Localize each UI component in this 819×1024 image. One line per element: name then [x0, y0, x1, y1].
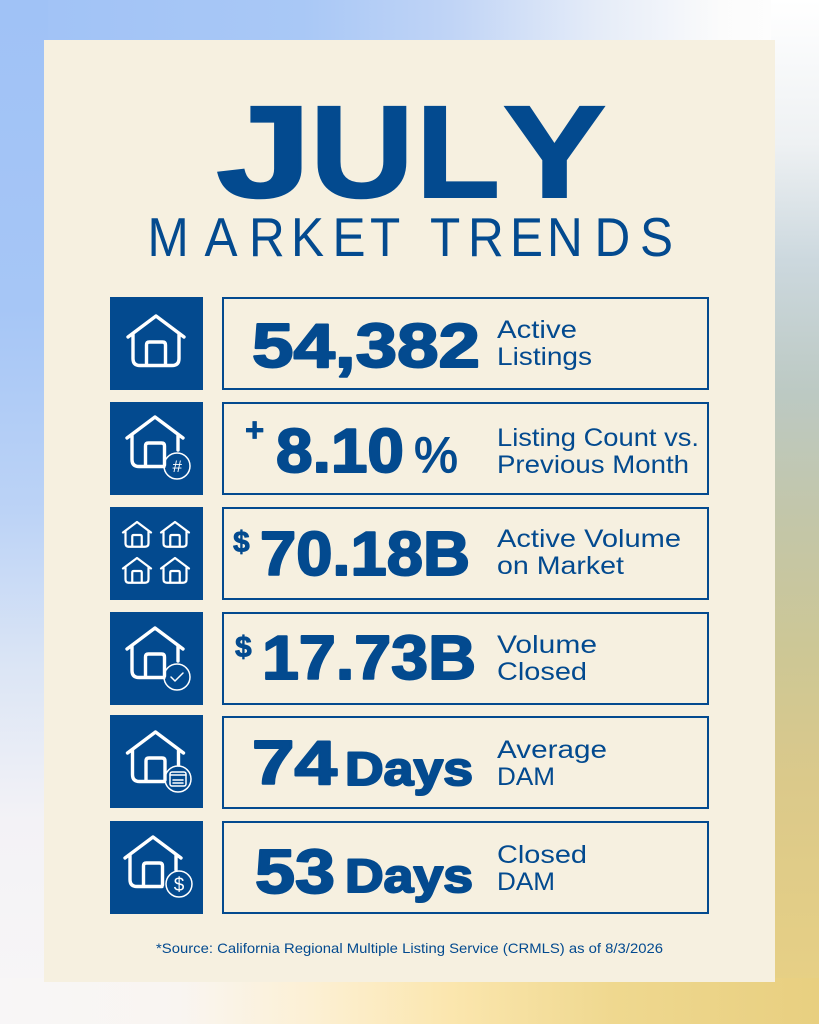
row: closed DAM — [110, 821, 708, 914]
value box — [223, 822, 708, 913]
title: JULY: J — [216, 78, 312, 225]
title: JULY: L — [416, 78, 500, 225]
icon: house — [110, 297, 203, 390]
source footnote: *Source: California Regional Multiple Listing Service (CRMLS) as of 8/3/2026 — [156, 940, 663, 956]
label: Volume — [497, 631, 597, 659]
value box — [223, 717, 708, 808]
subtitle: Market Trends: MARKET TRENDS — [148, 208, 673, 269]
row: active volume — [110, 507, 708, 600]
value: 8.10 — [276, 417, 404, 486]
value: 54,382 — [252, 312, 480, 381]
label: DAM — [497, 868, 555, 896]
label: Listings — [497, 343, 592, 371]
icon: house with check badge — [110, 612, 203, 705]
value: % — [414, 427, 458, 483]
icon: house with calendar badge — [110, 715, 203, 808]
label: on Market — [497, 552, 624, 580]
value box — [223, 403, 708, 494]
value: 17.73B — [262, 624, 476, 693]
row: active listings — [110, 297, 708, 390]
label: Active Volume — [497, 525, 681, 553]
label: Closed — [497, 841, 587, 869]
value: 53 — [255, 838, 335, 907]
label: Previous Month — [497, 451, 689, 479]
value: + — [245, 411, 264, 448]
label: Listing Count vs. — [497, 424, 699, 452]
title: JULY: U — [310, 78, 414, 225]
label: Average — [497, 736, 607, 764]
value: 70.18B — [260, 520, 470, 589]
row: listing count change — [110, 402, 708, 495]
icon: house with hash badge: # — [172, 457, 182, 476]
value box — [223, 508, 708, 599]
value: 74 — [252, 729, 338, 798]
icon: four houses — [110, 507, 203, 600]
value box — [223, 298, 708, 389]
label: DAM — [497, 763, 555, 791]
row: average DAM — [110, 715, 708, 808]
value: Days — [345, 849, 473, 902]
label: Active — [497, 316, 577, 344]
title: JULY: Y — [503, 78, 606, 225]
value: Days — [345, 742, 473, 795]
value: $ — [233, 526, 250, 559]
icon: house with dollar badge — [110, 821, 203, 914]
row: volume closed — [110, 612, 708, 705]
icon: house with hash badge — [110, 402, 203, 495]
label: Closed — [497, 658, 587, 686]
value: $ — [235, 631, 252, 664]
value box — [223, 613, 708, 704]
icon: house with dollar badge: $ — [174, 875, 185, 896]
